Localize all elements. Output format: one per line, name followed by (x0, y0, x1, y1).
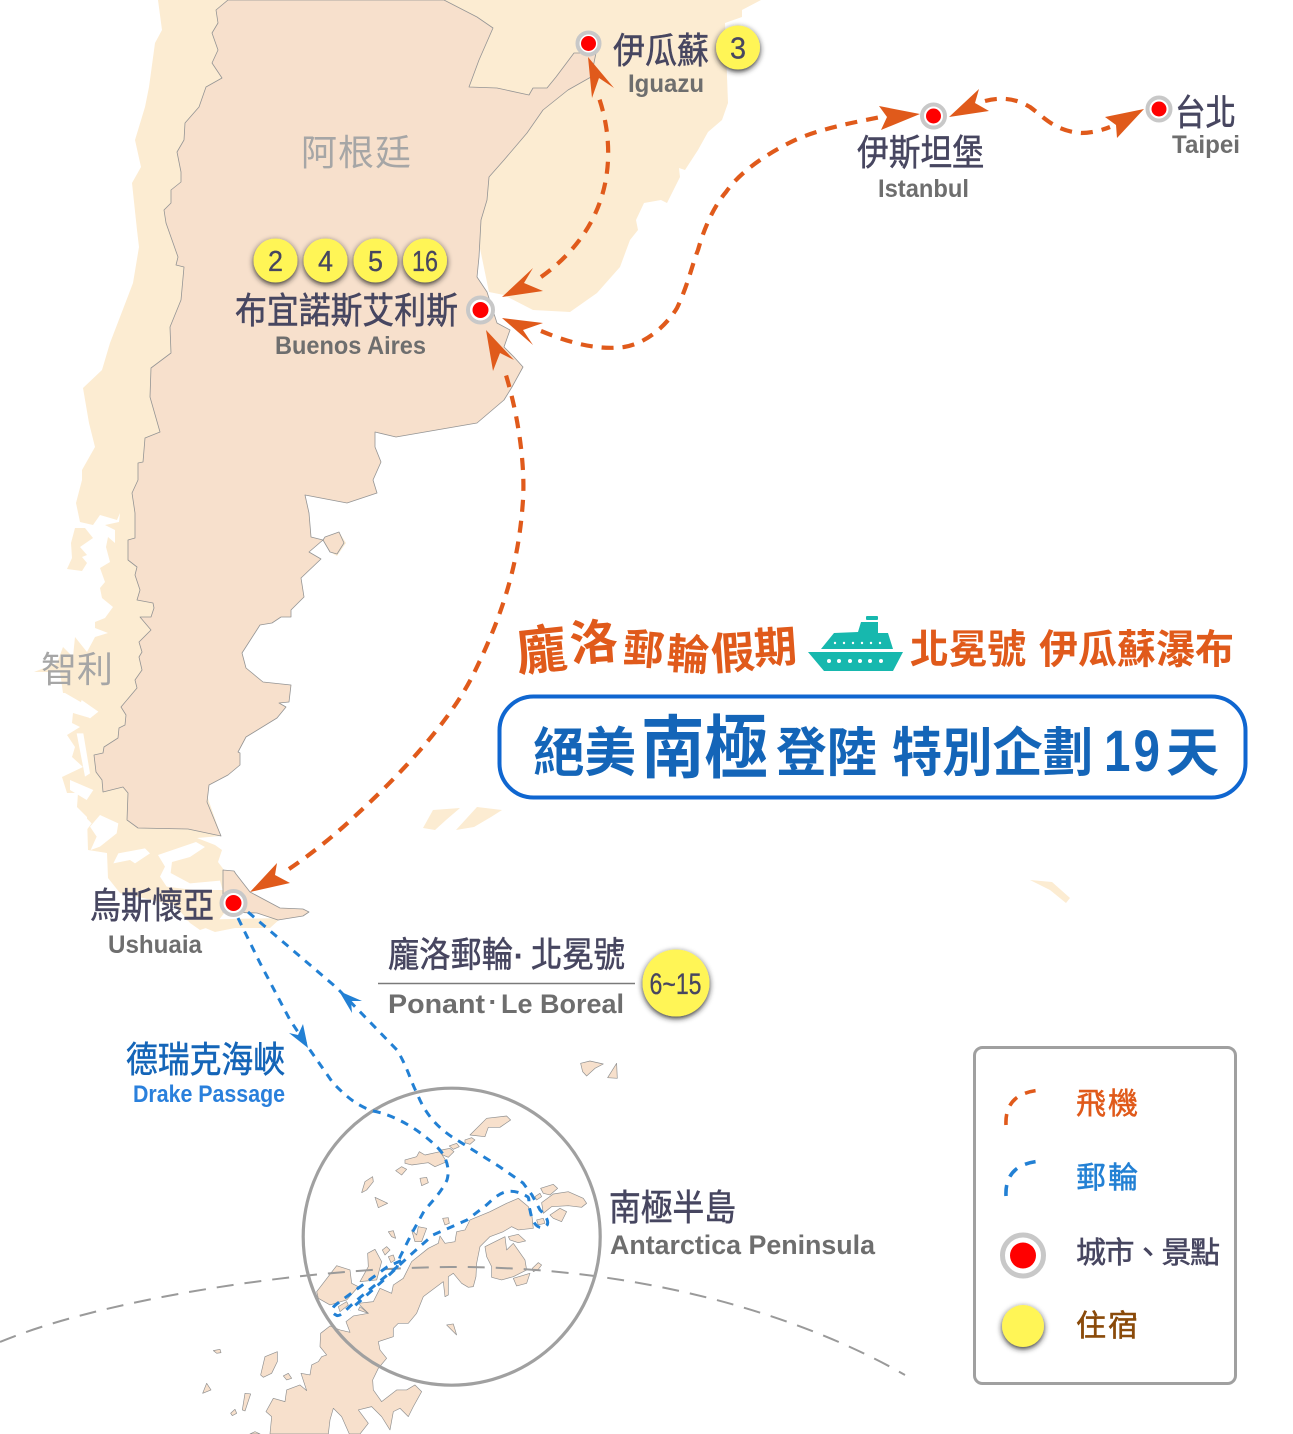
legend: cruise (1006, 1161, 1138, 1196)
label: Ushuaia: 烏斯懷亞 (90, 885, 214, 926)
accommodation badge: nights 6-15: 6~15 (650, 968, 702, 1001)
label: Taipei: Taipei (1172, 131, 1240, 159)
legend: city or attraction: 城市、景點 (1076, 1237, 1220, 1270)
title box: Antarctica landing special 19 days: 登陸 (776, 724, 877, 783)
label: Ponant Le Boreal ship name: · (488, 987, 498, 1017)
land: Antarctic Peninsula and islands (203, 1061, 617, 1434)
title line one: Ponant cruise holiday, Le Boreal, Iguazu Falls: 龐 (513, 620, 570, 683)
city marker: Iguazu (578, 32, 600, 54)
label: Iguazu (613, 30, 709, 98)
title line one: Ponant cruise holiday, Le Boreal, Iguazu Falls: 輪 (665, 630, 711, 680)
accommodation badges: nights 2, 4, 5, 16: 16 (412, 246, 438, 278)
label: Istanbul: Istanbul (878, 175, 969, 203)
magnifier circle: Antarctic Peninsula (303, 1088, 600, 1385)
label: Antarctic Peninsula (609, 1187, 876, 1260)
label: Ponant Le Boreal ship name: Ponant (388, 989, 485, 1019)
label: Buenos Aires: 布宜諾斯艾利斯 (235, 290, 458, 331)
label: Buenos Aires: Buenos Aires (275, 332, 426, 360)
accommodation badges: nights 2, 4, 5, 16: 4 (318, 246, 333, 278)
title line one: Ponant cruise holiday, Le Boreal, Iguazu Falls: 期 (752, 623, 799, 674)
accommodation badges: nights 2, 4, 5, 16: 2 (268, 246, 283, 278)
white fjords of southern Chile (70, 700, 223, 890)
label: Buenos Aires (235, 290, 458, 360)
label: Ponant Le Boreal ship name: 龐洛郵輪 (388, 936, 513, 975)
legend: accommodation (1002, 1305, 1138, 1347)
city marker: Buenos Aires (468, 298, 493, 322)
label: Antarctic Peninsula: 南極半島 (609, 1187, 736, 1228)
label: Ponant Le Boreal ship name: 北冕號 (531, 936, 625, 975)
land: Argentina (94, 0, 596, 920)
title box: Antarctica landing special 19 days: 南極 (641, 710, 768, 787)
title line one: Ponant cruise holiday, Le Boreal, Iguazu Falls: 假 (709, 628, 757, 680)
label: Chile: 智利 (41, 649, 113, 690)
flight route arrows (250, 57, 1144, 892)
title box: Antarctica landing special 19 days (500, 696, 1246, 798)
title box: Antarctica landing special 19 days: 特別企劃 (892, 724, 1093, 783)
title line one: Ponant cruise holiday, Le Boreal, Iguazu Falls: 洛 (568, 616, 620, 672)
cruise route arrows (289, 991, 362, 1048)
legend: flight (1006, 1088, 1138, 1125)
label: Argentina: 阿根廷 (301, 132, 411, 173)
label: Ponant Le Boreal ship name: · (514, 938, 524, 974)
icon: cruise ship (808, 616, 903, 671)
accommodation badges: nights 2, 4, 5, 16 (254, 238, 447, 282)
legend panel (974, 1048, 1236, 1384)
label: Istanbul: 伊斯坦堡 (857, 132, 984, 173)
title box: Antarctica landing special 19 days: 天 (1166, 724, 1219, 783)
title line one: Ponant cruise holiday, Le Boreal, Iguazu Falls: 伊瓜蘇瀑布 (1039, 628, 1234, 672)
legend: city or attraction (1002, 1235, 1220, 1276)
label: Ushuaia: Ushuaia (108, 931, 203, 959)
accommodation badge: night 3: 3 (730, 30, 746, 66)
legend: cruise: 郵輪 (1076, 1162, 1138, 1195)
label: Antarctic Peninsula: Antarctica Peninsula (610, 1230, 876, 1260)
label: Ushuaia (90, 885, 214, 959)
legend: accommodation: 住宿 (1076, 1310, 1138, 1343)
label: Drake Passage: 德瑞克海峽 (126, 1039, 285, 1080)
label: Ponant Le Boreal ship name: Le Boreal (501, 989, 624, 1019)
city marker: Ushuaia (222, 891, 246, 915)
label: Iguazu: Iguazu (628, 70, 704, 98)
flight routes (289, 98, 1110, 869)
accommodation badge: night 3 (716, 26, 760, 70)
cruise routes (238, 912, 548, 1316)
title line one: Ponant cruise holiday, Le Boreal, Iguazu Falls: 郵 (621, 625, 666, 675)
title line one: Ponant cruise holiday, Le Boreal, Iguazu Falls (513, 616, 1234, 683)
land: neighbouring countries (Chile, Brazil, Uruguay) (34, 0, 1070, 932)
label: Ponant Le Boreal ship name (378, 936, 635, 1019)
title line one: Ponant cruise holiday, Le Boreal, Iguazu Falls: 北冕號 (910, 628, 1026, 672)
city marker: Taipei (1148, 98, 1170, 120)
label: Drake Passage (126, 1039, 285, 1108)
label: Taipei (1172, 92, 1240, 159)
label: Taipei: 台北 (1175, 92, 1236, 133)
accommodation badges: nights 2, 4, 5, 16: 5 (368, 246, 383, 278)
accommodation badge: nights 6-15 (642, 950, 710, 1016)
label: Iguazu: 伊瓜蘇 (613, 30, 709, 71)
legend: flight: 飛機 (1076, 1088, 1138, 1121)
title box: Antarctica landing special 19 days: 絕美 (533, 724, 636, 783)
label: Drake Passage: Drake Passage (133, 1081, 285, 1108)
label: Istanbul (857, 132, 984, 203)
title box: Antarctica landing special 19 days: 19 (1104, 720, 1160, 784)
city marker: Istanbul (922, 104, 945, 128)
Antarctic circle dashed line (0, 1267, 905, 1375)
